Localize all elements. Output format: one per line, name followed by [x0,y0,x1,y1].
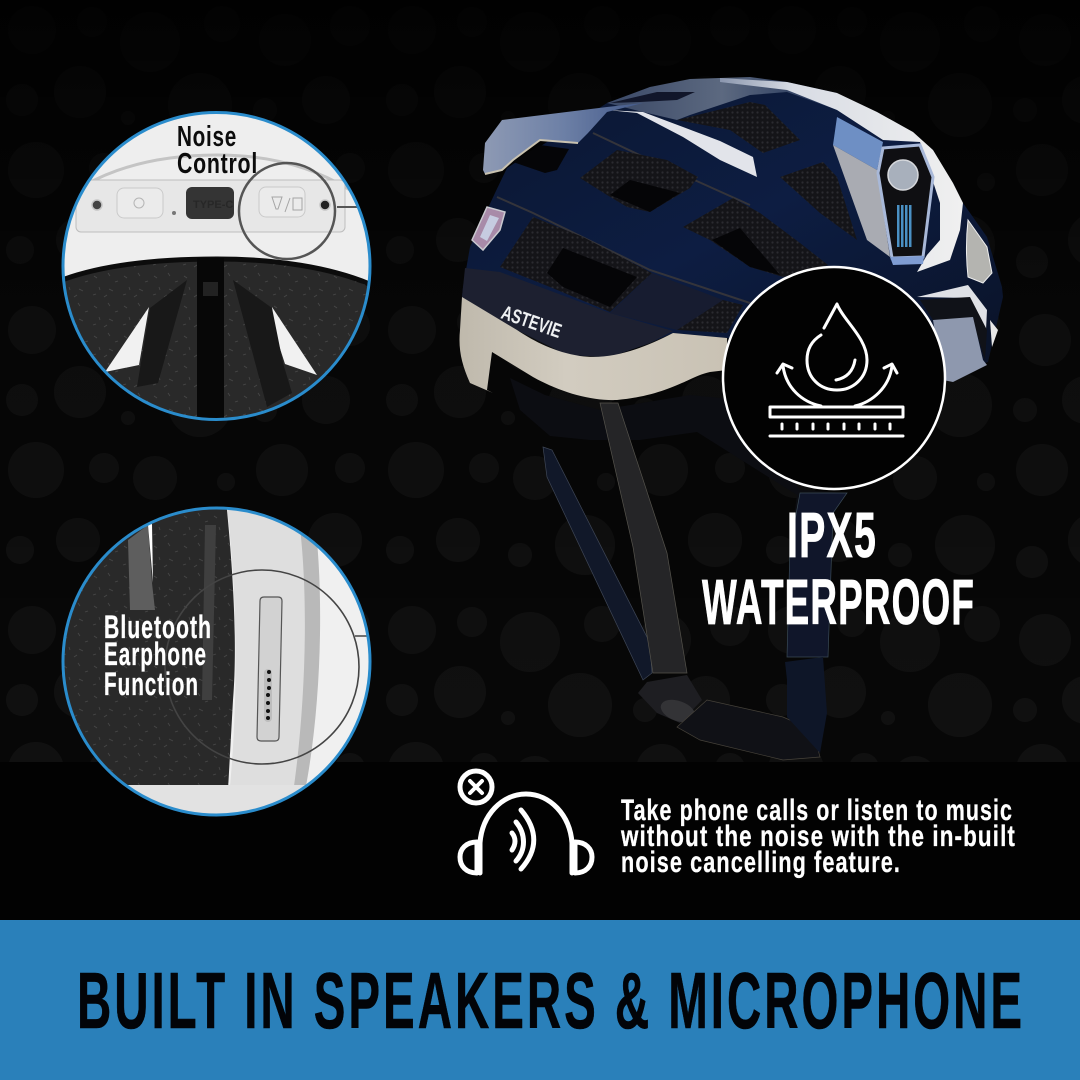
circle border [63,508,370,815]
white top and right band [720,78,963,272]
panel: bluetooth earphone detail circle [55,500,380,820]
rear light [472,207,505,250]
front light housing [878,145,933,258]
power button [117,188,163,218]
white centre stripe [607,110,757,177]
vent openings [513,145,780,307]
front silver block [833,117,890,257]
label: bluetooth earphone function [104,609,212,702]
helmet product image [459,77,1003,760]
foam underside [65,262,368,418]
label: noise control: Control [177,148,258,180]
light button [259,187,305,217]
magnifier ring [239,163,335,259]
small top vent [610,92,695,103]
navy shell [462,78,1003,380]
lower right trim [917,285,987,330]
vent openings [105,307,149,372]
footer banner [0,920,1080,1080]
magnifier ring [165,570,359,764]
label: noise control: Noise [177,121,237,153]
type-c port cover [186,187,234,219]
description text [620,794,1016,879]
side shell [228,510,305,785]
visor [483,103,643,174]
groove lines [497,133,750,303]
label: noise control [177,121,258,180]
chin strap and harness [510,378,847,760]
waterproof badge [723,267,945,489]
heading: IPX5 waterproof [702,499,975,638]
straps [137,280,187,387]
button panel [76,180,345,232]
bottom edge [128,785,305,814]
cream lower shell [459,297,727,400]
circle border [63,112,370,420]
foam interior [55,500,235,790]
blue indicator stripes [897,205,912,247]
headlamp [966,220,992,283]
charcoal lower band [462,268,673,357]
background: dark bubble pattern [0,0,1080,762]
heading: IPX5 waterproof: IPX5 [787,499,877,571]
speaker slot [257,597,282,741]
lens [888,160,918,190]
description text: noise cancelling feature. [621,846,901,879]
helmet logo: ASTEVIE [498,302,564,343]
black strip behind description [0,762,1080,920]
panel: noise control detail circle [55,110,375,425]
label: bluetooth earphone function: Function [104,666,199,702]
top grey hump [607,77,837,120]
icon: noise cancelling headphones [460,771,592,873]
type-c port cover: TYPE-C [193,199,233,211]
white helmet surface [60,110,375,285]
label: bluetooth earphone function: Earphone [104,636,207,672]
label: bluetooth earphone function: Bluetooth [104,609,212,645]
icon: water drop over membrane [770,304,903,436]
vents [500,102,857,333]
